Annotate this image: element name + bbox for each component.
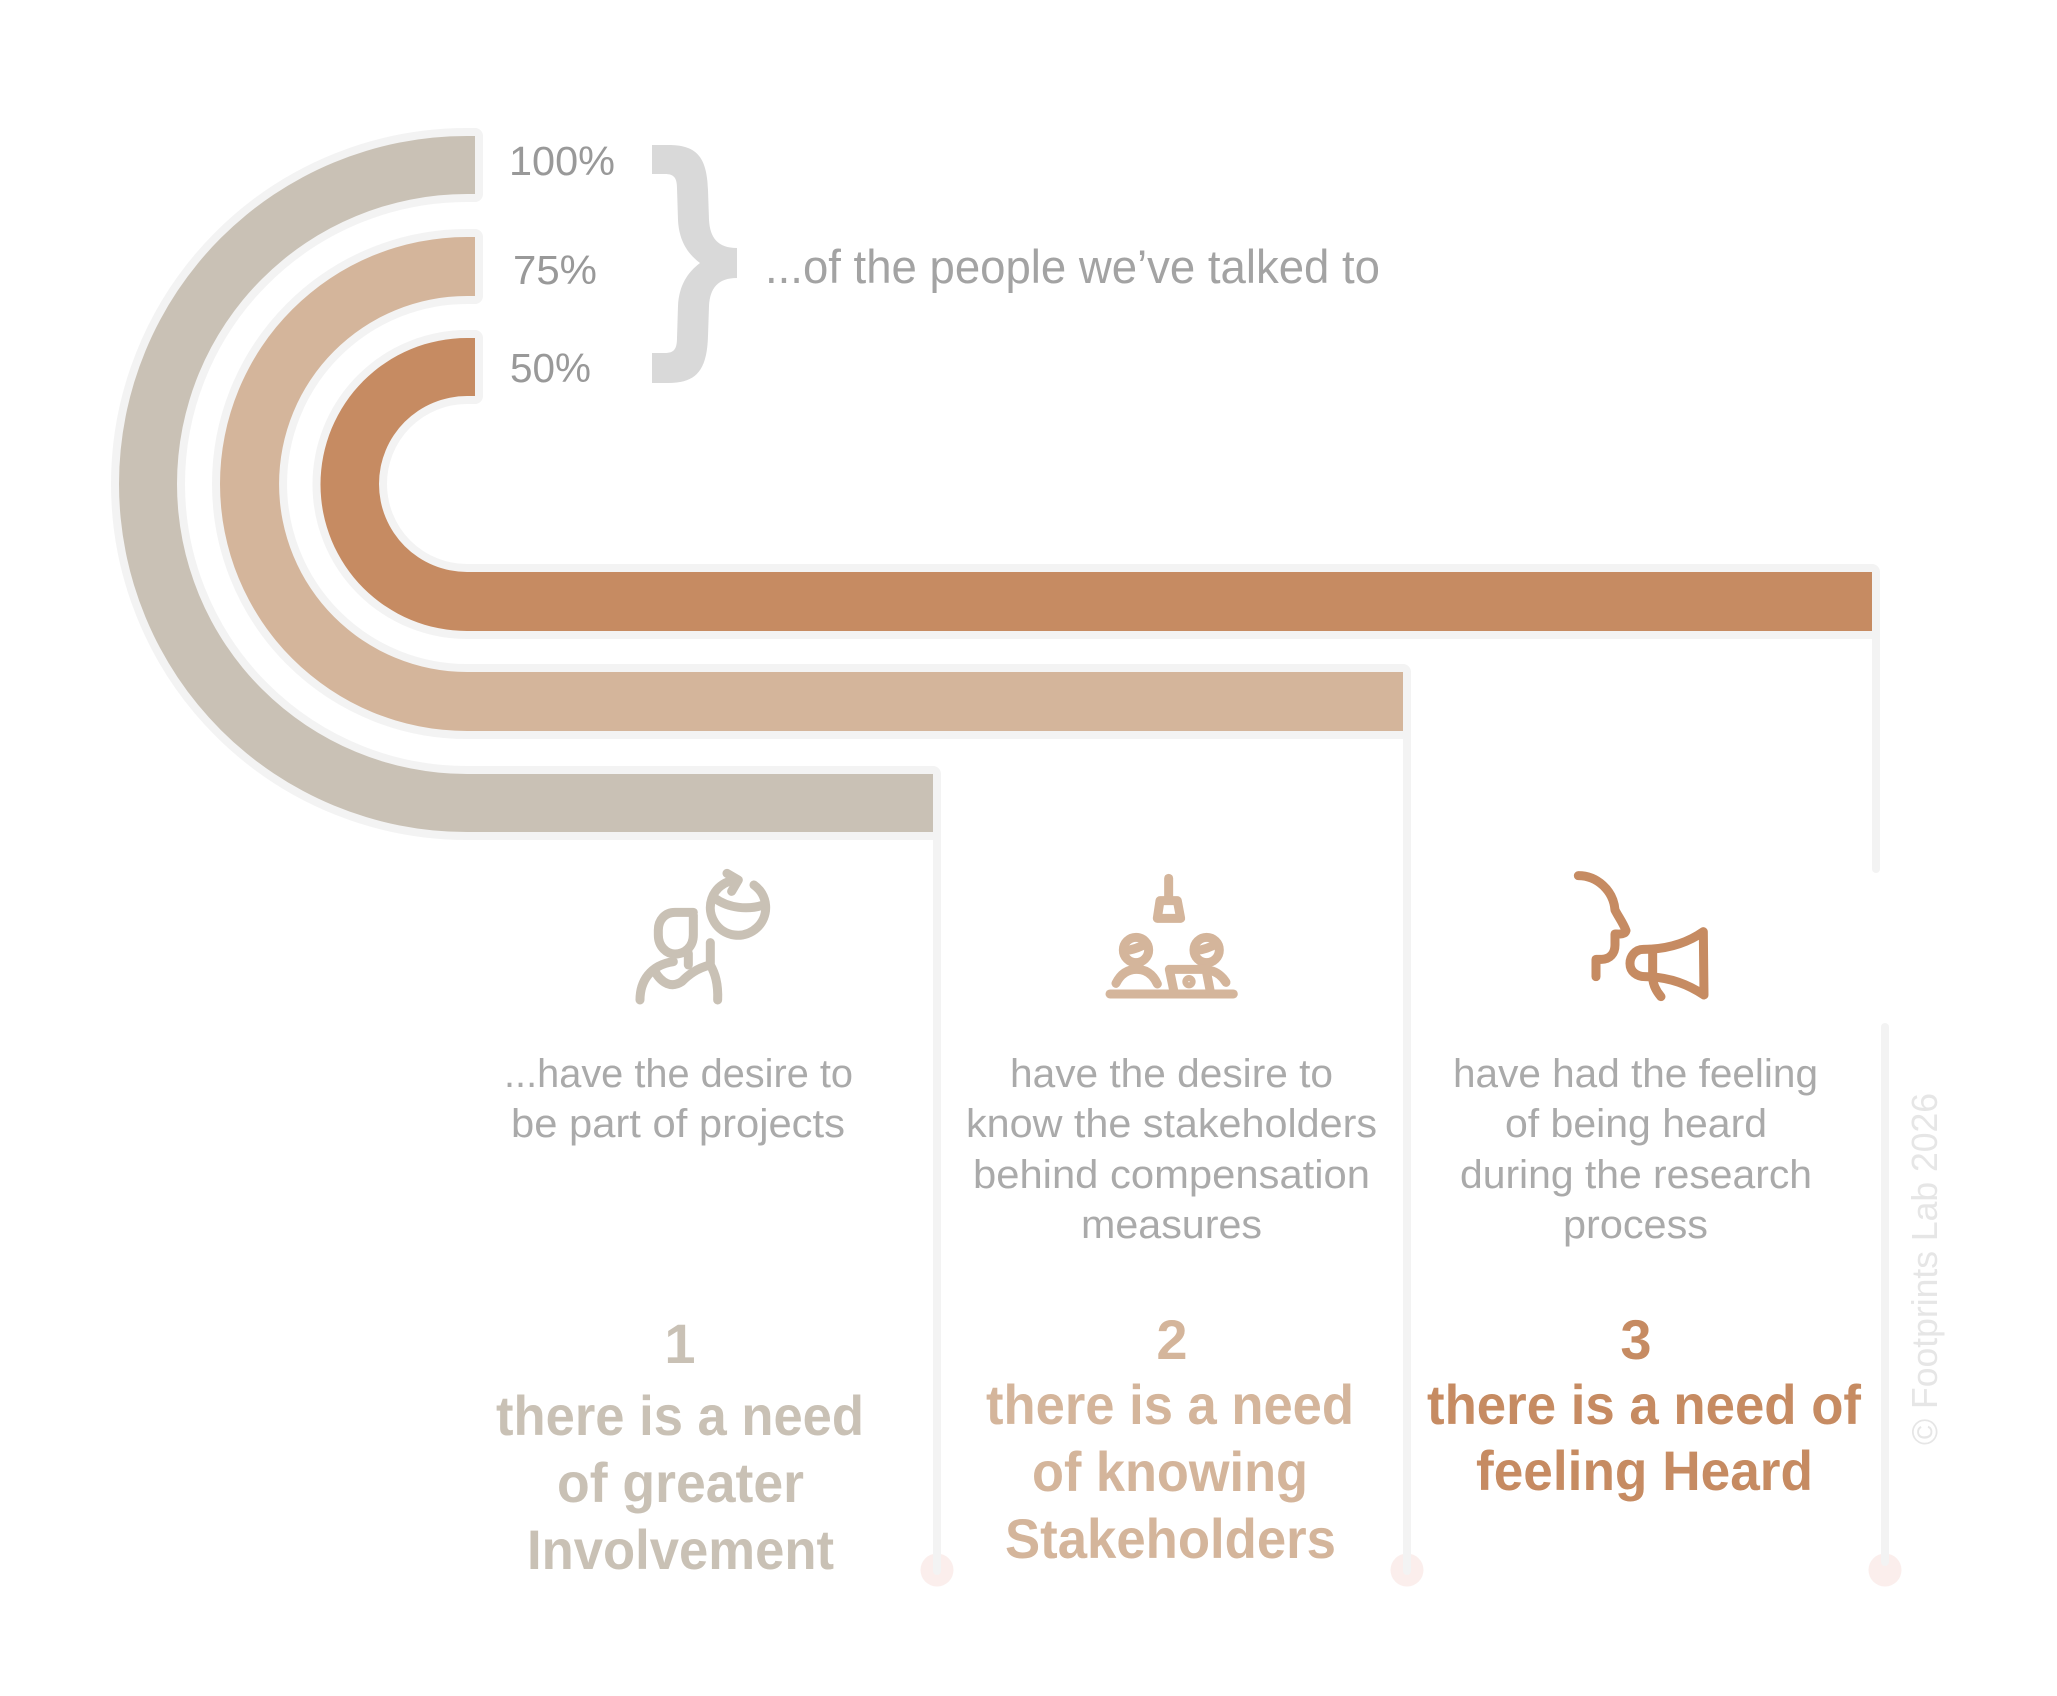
column 1 description: ...have the desire to [504,1052,853,1096]
column 3 heading: feeling Heard [1476,1439,1813,1502]
column 2 heading: of knowing [1032,1440,1308,1503]
column 3 heading [1427,1308,1861,1502]
column 3 description: have had the feeling [1453,1052,1818,1096]
column 2 heading [986,1308,1354,1570]
connector line: column 3 lower [1881,1027,1889,1562]
connector line: column 3 upper [1872,600,1880,869]
column 2 description: behind compensation [973,1153,1370,1197]
column 1 heading: 1 [664,1312,696,1375]
column 1 heading: there is a need [496,1384,864,1447]
column 3 heading: there is a need of [1427,1373,1861,1436]
column 1 heading: of greater [557,1451,804,1514]
column 2 description [966,1052,1377,1247]
column 2 description: measures [1081,1203,1262,1247]
arc bar: 100% involvement [119,136,933,832]
dot: column 3 end [1868,1554,1902,1586]
label: 50%: 50% [510,345,591,391]
connector line: column 2 [1403,700,1411,1571]
column 2 description: know the stakeholders [966,1102,1377,1146]
icon: person with rotating globe [640,873,766,1000]
column 1 heading [496,1312,864,1581]
copyright watermark: © Footprints Lab 2026 [1904,1093,1945,1445]
column 3 description: process [1563,1203,1708,1247]
icon: face with megaphone [1578,876,1704,997]
column 1 heading: Involvement [527,1518,834,1581]
subtitle: ...of the people we’ve talked to [765,240,1380,293]
column 3 heading: 3 [1620,1308,1652,1371]
icon: stakeholders at a table under a lamp [1110,878,1233,994]
column 2 heading: there is a need [986,1373,1354,1436]
arc bar: 75% stakeholders [220,237,1403,731]
connector line: column 1 [933,800,941,1571]
dot: column 1 end [920,1554,954,1586]
column 1 description [504,1052,853,1146]
arc bar: 50% heard [320,338,1872,631]
label: 75%: 75% [513,247,597,293]
column 1 description: be part of projects [511,1102,845,1146]
column 2 description: have the desire to [1010,1052,1333,1096]
dot: column 2 end [1390,1554,1424,1586]
column 2 heading: 2 [1156,1308,1188,1371]
column 3 description: during the research [1460,1153,1812,1197]
column 3 description [1453,1052,1818,1247]
label: 100%: 100% [509,138,615,184]
column 2 heading: Stakeholders [1005,1507,1336,1570]
curly brace [652,145,737,383]
column 3 description: of being heard [1505,1102,1767,1146]
